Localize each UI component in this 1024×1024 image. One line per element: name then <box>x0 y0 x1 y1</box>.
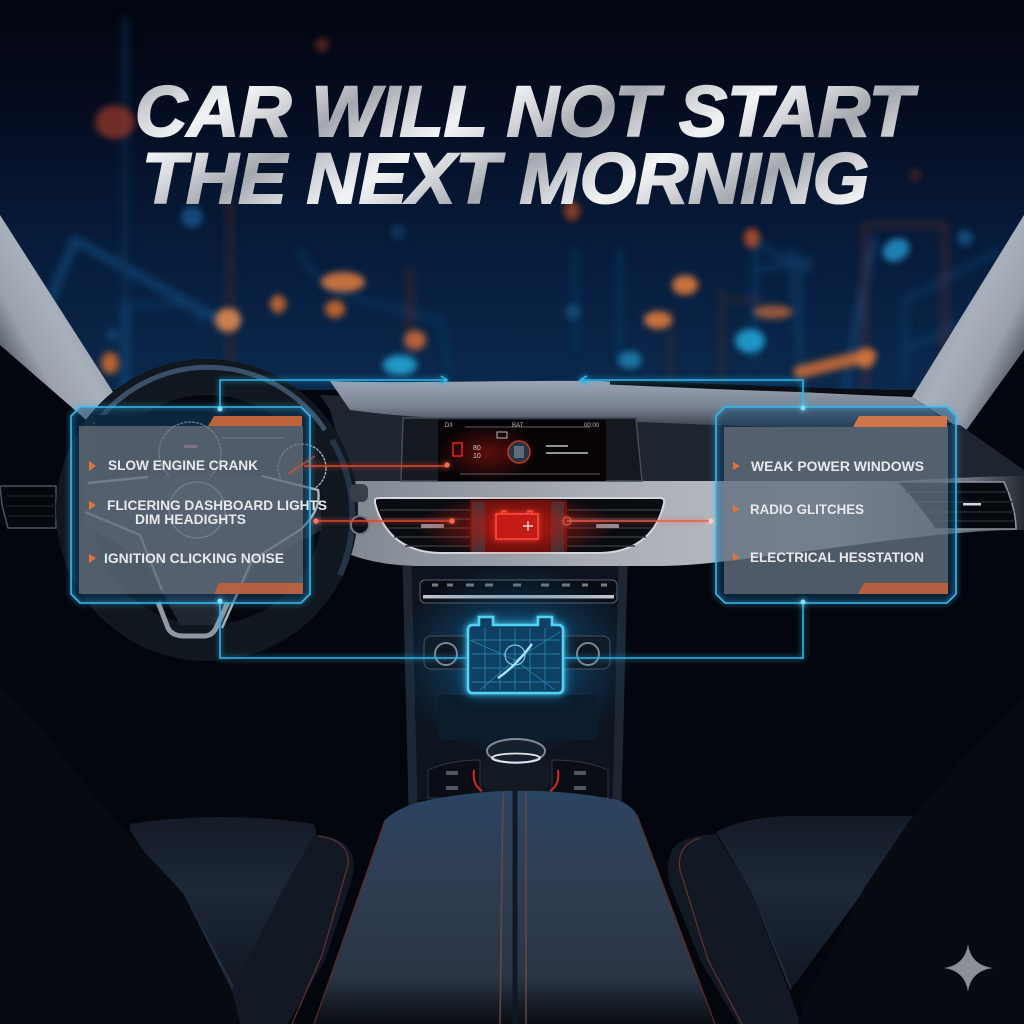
upper dash dark fascia <box>320 395 1024 482</box>
title line 2: THE NEXT MORNING <box>142 140 869 219</box>
text: radio glitches: RADIO GLITCHES <box>750 502 864 517</box>
battery outer glow <box>466 622 565 695</box>
steering wheel <box>74 367 369 643</box>
left seat bolster <box>232 835 354 1024</box>
bullet <box>89 461 96 471</box>
centre console <box>403 566 627 800</box>
glow behind blue battery <box>395 565 635 755</box>
console side rails <box>407 566 623 805</box>
icon: red battery warning <box>496 511 538 539</box>
connector node dots <box>218 406 806 604</box>
text: electrical hesitation: ELECTRICAL HESSTATION <box>750 550 924 565</box>
lower console tray <box>438 695 598 740</box>
right seat bolster <box>668 834 800 1024</box>
centre armrest <box>314 790 715 1024</box>
left front seat cushion <box>130 817 316 997</box>
central display: 10 <box>473 453 481 460</box>
left rear seat back <box>0 687 240 1024</box>
background: night city through windshield <box>0 15 1024 390</box>
bullet <box>733 462 740 470</box>
bottom spoke silver U <box>158 602 228 636</box>
centre air vents <box>375 494 664 558</box>
connector: left panel to display arrow <box>220 376 447 407</box>
silver trim band <box>345 476 1024 566</box>
orange tab top <box>853 416 947 427</box>
central display: D/I <box>445 423 453 429</box>
title <box>135 73 919 219</box>
text: dim headlights: DIM HEADIGHTS <box>135 512 246 527</box>
dark lower cabin base <box>0 390 1024 1024</box>
dashboard top <box>330 381 950 427</box>
gear controls and knob <box>428 739 608 798</box>
city circuit lines <box>50 20 1000 430</box>
text: weak power windows: WEAK POWER WINDOWS <box>751 459 924 474</box>
bullet <box>733 505 740 513</box>
city bokeh lights <box>95 38 973 375</box>
icon: blue holographic battery <box>468 617 563 693</box>
bullet <box>89 501 96 510</box>
text: slow engine crank: SLOW ENGINE CRANK <box>108 458 258 473</box>
left symptom panel <box>71 407 327 603</box>
instrument cluster <box>95 415 326 492</box>
left air vent <box>0 486 56 528</box>
right rear seat back <box>798 697 1024 1024</box>
wheel hub and spokes <box>85 476 322 625</box>
dash edge shadow <box>610 382 912 393</box>
climate controls <box>424 636 610 669</box>
control button strip <box>420 580 617 603</box>
red link: left panel to battery <box>313 518 455 524</box>
right front seat cushion <box>716 816 915 990</box>
left A-pillar <box>0 215 115 425</box>
central display: 00:00 <box>584 423 600 429</box>
orange tab bottom <box>858 583 948 594</box>
red link: battery to right panel <box>563 517 713 525</box>
text: ignition clicking noise: IGNITION CLICKING NOISE <box>104 551 284 566</box>
title line 1: CAR WILL NOT START <box>135 73 919 152</box>
right symptom panel <box>716 407 956 603</box>
central display: 80 <box>473 445 481 452</box>
icon: sparkle watermark <box>944 944 993 992</box>
connector: battery loop to both panels <box>220 603 803 658</box>
central display: BAT <box>512 423 524 429</box>
red link: left panel to display <box>288 456 450 474</box>
bullet <box>89 554 96 563</box>
orange tab top <box>208 416 302 426</box>
connector: right panel to display arrow <box>580 376 803 407</box>
right air vent <box>897 482 1016 529</box>
central display <box>401 418 642 481</box>
orange tab bottom <box>214 583 303 594</box>
text: flickering dashboard lights: FLICERING DASHBOARD LIGHTS <box>107 498 327 513</box>
start button and stalk <box>350 484 369 534</box>
right A-pillar <box>912 215 1024 432</box>
bullet <box>733 553 740 561</box>
